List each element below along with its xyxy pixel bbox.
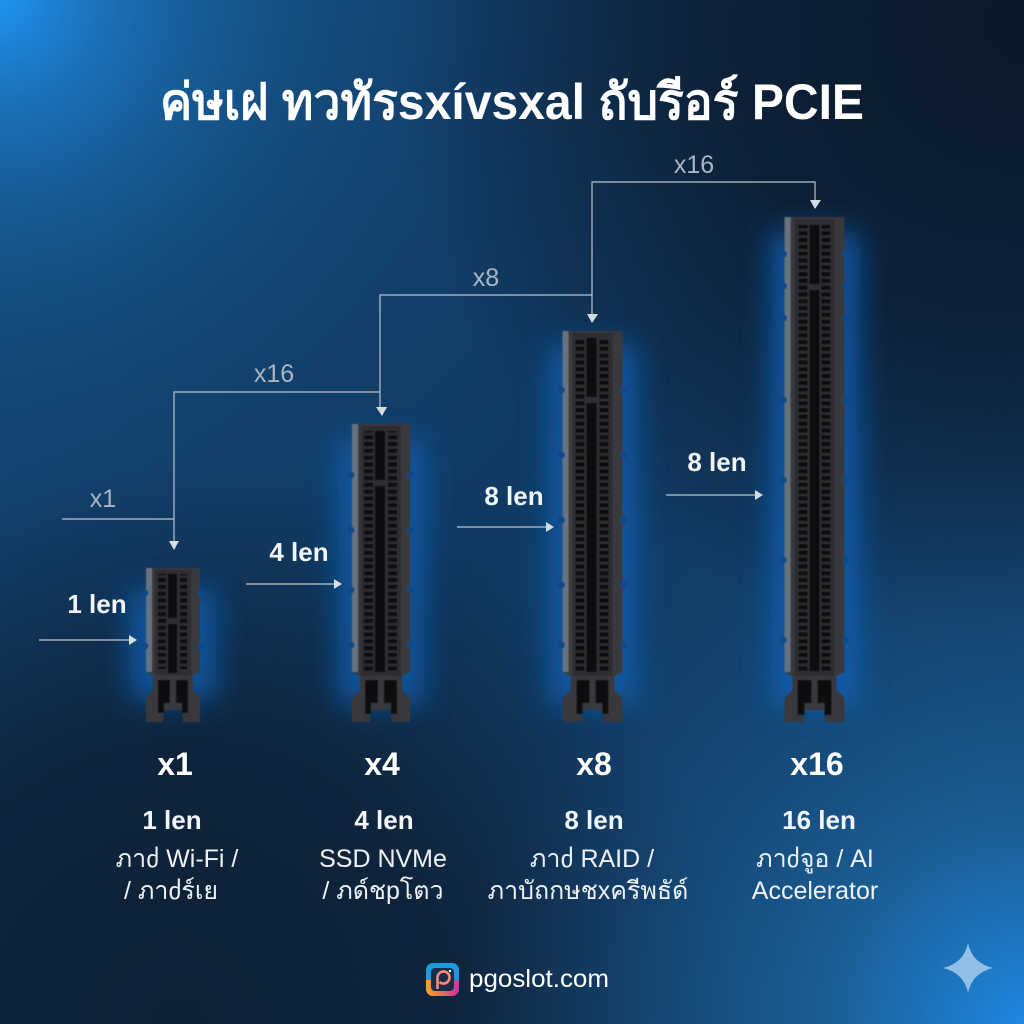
lane arrow: 4 len: [246, 537, 342, 589]
lane arrow: 8 len: 8 len: [484, 481, 544, 511]
label: x16: 16 len: [782, 805, 856, 835]
bracket arrow: x16: x16: [674, 151, 714, 179]
label: x4: x4: [364, 746, 400, 782]
lane arrow: 8 len: [457, 481, 554, 532]
label: x16: [752, 746, 878, 905]
connector glows: [130, 232, 859, 707]
lane arrow: 1 len: 1 len: [67, 589, 127, 619]
label: x1: / ภาძร์เย: [124, 877, 218, 905]
label: x8: ภาบัถกษชxครีพธัด์: [488, 877, 688, 905]
label: x4: 4 len: [354, 805, 414, 835]
label: x16: Accelerator: [752, 877, 878, 905]
label: x1: 1 len: [142, 805, 202, 835]
label: x4: SSD NVMe: [319, 845, 447, 873]
label: x1: x1: [157, 746, 193, 782]
connector: x4: [348, 424, 414, 722]
icon: sparkle star: [943, 943, 993, 993]
bracket arrow: x16 to x4: x16: [254, 360, 294, 388]
footer logo icon: [426, 963, 459, 996]
title: ค่ษเฝ ทวทัรsxívsxal ถับรีอร์ PCIE: [160, 74, 864, 130]
lane arrow: 4 len: 4 len: [269, 537, 329, 567]
bracket arrow: x16: [592, 151, 821, 295]
bracket arrow: x1: x1: [90, 485, 116, 513]
bracket arrow: x8: x8: [473, 264, 499, 292]
label: x8: [488, 746, 688, 905]
bracket arrow: x16 to x4: [174, 360, 387, 519]
lane arrow: 1 len: [39, 589, 137, 645]
label: x4: [319, 746, 447, 905]
bracket arrow: x8: [380, 264, 598, 392]
label: x1: ภาძ Wi-Fi /: [116, 845, 238, 873]
label: x4: / ภด์ชpโตว: [322, 876, 444, 905]
footer website: pgoslot.com: [469, 965, 609, 993]
connector: x1: [142, 568, 204, 722]
label: x8: x8: [576, 746, 612, 782]
connector: x8: [558, 331, 627, 722]
label: x16: ภาძจูอ / AI: [756, 845, 874, 874]
label: x1: [116, 746, 238, 905]
lane arrow: 8 len to x16: 8 len: [687, 447, 747, 477]
label: x8: 8 len: [564, 805, 624, 835]
lane arrow: 8 len to x16: [666, 447, 763, 500]
bracket arrow: x1: [62, 485, 179, 550]
label: x16: x16: [790, 746, 844, 782]
connector: x16: [780, 217, 849, 722]
label: x8: ภาძ RAID /: [530, 845, 654, 873]
